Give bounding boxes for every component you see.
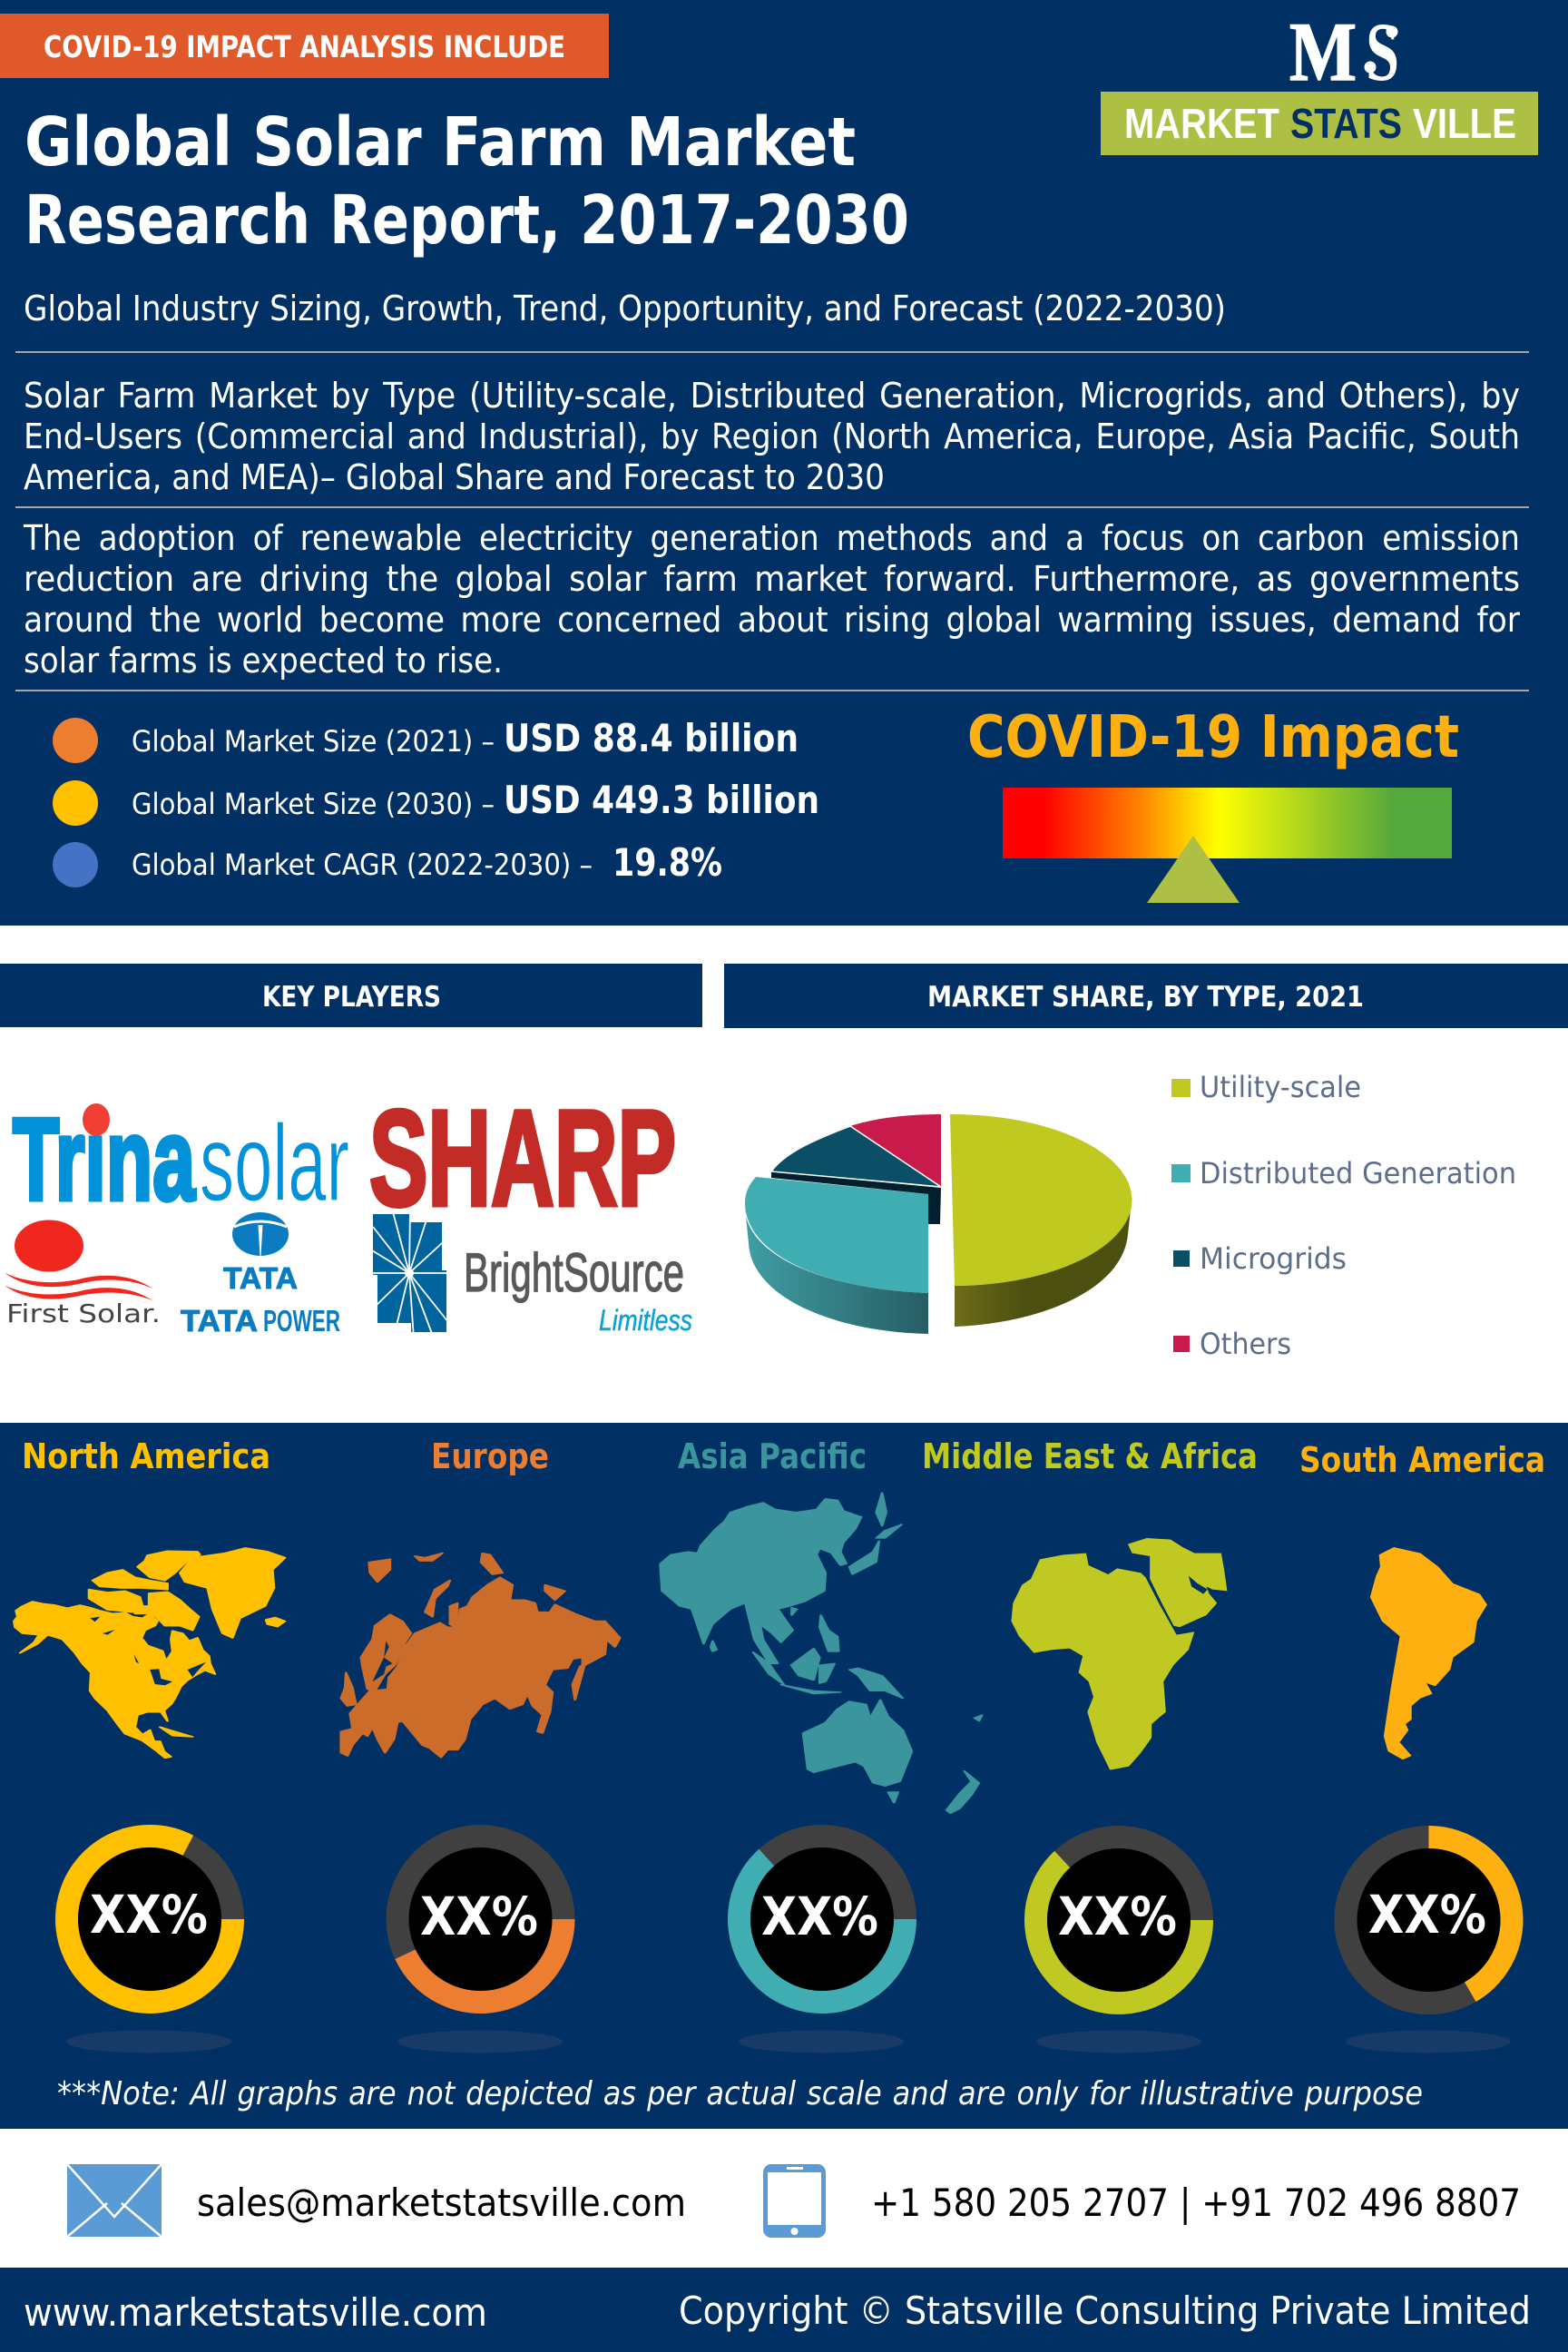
- panel: regions: [0, 1423, 1568, 2129]
- logo: Sharp: SHARP: [369, 1082, 676, 1234]
- donut: North America: XX%: [90, 1884, 208, 1945]
- slice: others: [850, 1114, 941, 1187]
- heading: key players: KEY PLAYERS: [262, 981, 441, 1014]
- donut: Europe: XX%: [420, 1886, 538, 1947]
- donut: Middle East and Africa: [1036, 1837, 1201, 2004]
- text block: segmentation: [24, 376, 1520, 497]
- donut: Asia Pacific: XX%: [761, 1886, 878, 1947]
- website: www.marketstatsville.com: [24, 2290, 487, 2335]
- title: Global Solar Farm Market: [24, 103, 856, 181]
- map: South America: [1370, 1547, 1487, 1759]
- stat: market size 2030: [53, 778, 819, 826]
- text block: description: [23, 518, 1520, 681]
- stat: market size 2030: Global Market Size (2030) –: [132, 787, 495, 821]
- logo: Market Stats Ville: S: [1366, 5, 1399, 98]
- chart: market share pie: [745, 1114, 1132, 1334]
- logo: Trina Solar: Trina: [13, 1094, 196, 1225]
- logo: First Solar: [5, 1220, 161, 1328]
- heading: Middle East and Africa: Middle East & Africa: [922, 1436, 1258, 1476]
- logo: Market Stats Ville: VILLE: [1413, 100, 1516, 147]
- stat: market size 2030: USD 449.3 billion: [504, 778, 819, 822]
- stat: CAGR: [53, 840, 722, 887]
- stats list: [53, 716, 819, 887]
- heading: market share: [724, 964, 1568, 1028]
- logo: Tata Power: TATA: [223, 1261, 298, 1295]
- heading: market share: MARKET SHARE, BY TYPE, 2021: [927, 981, 1364, 1014]
- donut: South America: [1346, 1837, 1512, 2004]
- logo: BrightSource: Limitless: [599, 1304, 692, 1337]
- covid label banner: [0, 14, 609, 78]
- icon: email envelope: [67, 2164, 162, 2237]
- panel: key player logos: [5, 1082, 692, 1338]
- legend item: others: Others: [1200, 1327, 1291, 1361]
- covid impact gauge: COVID-19 Impact: [967, 704, 1459, 771]
- legend item: distributed generation: Distributed Generation: [1200, 1156, 1516, 1191]
- heading: key players: [0, 964, 702, 1027]
- slice: distributed generation: [745, 1177, 928, 1334]
- icon: phone: [763, 2164, 826, 2238]
- donut: South America: XX%: [1368, 1884, 1486, 1945]
- legend item: microgrids: Microgrids: [1200, 1241, 1347, 1276]
- covid impact gauge: [967, 704, 1459, 903]
- logo: Tata Power: [181, 1212, 340, 1338]
- map: Asia Pacific: [661, 1493, 982, 1813]
- heading: Asia Pacific: Asia Pacific: [678, 1436, 867, 1476]
- legend item: utility-scale: Utility-scale: [1200, 1070, 1361, 1104]
- logo: Market Stats Ville: M: [1289, 5, 1357, 98]
- stat: market size 2021: [53, 716, 799, 763]
- stat: CAGR: Global Market CAGR (2022-2030) –: [132, 848, 593, 882]
- heading: Europe: Europe: [431, 1436, 549, 1476]
- donut: Middle East and Africa: XX%: [1058, 1886, 1177, 1947]
- logo: First Solar: First Solar.: [6, 1298, 161, 1328]
- map: North America: [14, 1548, 285, 1758]
- donut: Asia Pacific: [739, 1837, 906, 2003]
- title: Research Report, 2017-2030: [24, 181, 909, 260]
- logo: Tata Power: POWER: [263, 1304, 340, 1338]
- text block: description: solar farms is expected to rise.: [24, 641, 503, 681]
- covid label banner: COVID-19 IMPACT ANALYSIS INCLUDE: [44, 29, 565, 64]
- logo: Tata Power: TATA: [181, 1304, 258, 1338]
- stat: CAGR: 19.8%: [612, 840, 722, 885]
- logo: BrightSource: BrightSource: [464, 1242, 684, 1303]
- slice: microgrids: [771, 1126, 941, 1224]
- donut: Europe: [397, 1837, 564, 2002]
- donut shadows: [66, 2031, 1511, 2053]
- subtitle: Global Industry Sizing, Growth, Trend, Opportunity, and Forecast (2022-2030): [24, 289, 1226, 328]
- text block: segmentation: America, and MEA)– Global Share and Forecast to 2030: [24, 457, 885, 497]
- stat: market size 2021: USD 88.4 billion: [504, 716, 799, 760]
- logo: BrightSource: [368, 1209, 692, 1338]
- logo: Market Stats Ville: STATS: [1290, 100, 1402, 147]
- legend: market share: [1171, 1070, 1516, 1361]
- logo: Trina Solar: solar: [200, 1102, 349, 1224]
- title: [24, 103, 909, 260]
- footer panel: [0, 2268, 1568, 2352]
- logo: Market Stats Ville: MARKET: [1124, 100, 1279, 147]
- email address: sales@marketstatsville.com: [197, 2180, 686, 2225]
- map: Middle East and Africa: [1011, 1538, 1227, 1770]
- note: ***Note: All graphs are not depicted as per actual scale and are only for illustrative purpose: [57, 2075, 1423, 2112]
- logo: Market Stats Ville: [1101, 5, 1538, 155]
- heading: North America: North America: [22, 1436, 270, 1476]
- donut: North America: [67, 1836, 232, 2002]
- slice: utility-scale: [950, 1114, 1132, 1327]
- header panel background: [0, 0, 1568, 926]
- stat: market size 2021: Global Market Size (2021) –: [132, 724, 495, 759]
- map: Europe: [341, 1553, 620, 1758]
